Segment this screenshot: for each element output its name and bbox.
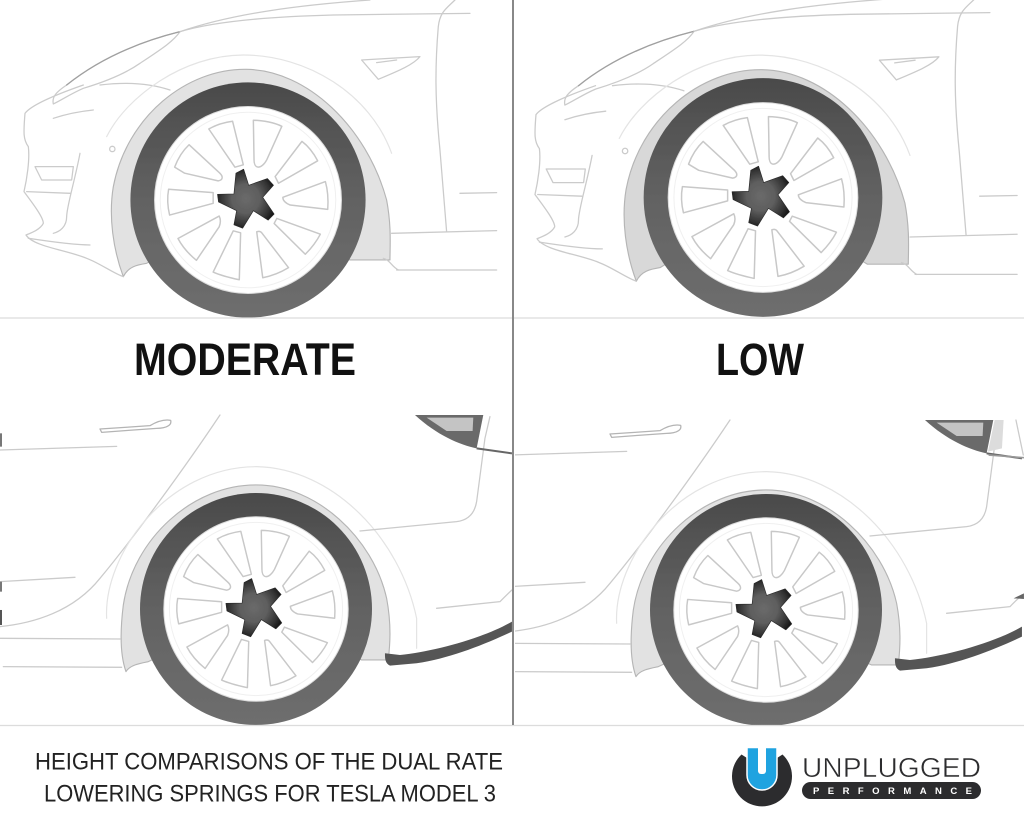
panel: moderate front wheel bbox=[24, 0, 497, 318]
panel: moderate rear wheel bbox=[0, 415, 512, 725]
heading: low: LOW bbox=[716, 334, 804, 385]
badge: performance bbox=[802, 782, 981, 799]
wordmark: UNPLUGGED bbox=[802, 752, 981, 783]
front wheel, low bbox=[644, 78, 882, 317]
caption: LOWERING SPRINGS FOR TESLA MODEL 3 bbox=[44, 780, 496, 808]
heading: moderate: MODERATE bbox=[134, 334, 356, 385]
front wheel, moderate bbox=[130, 82, 366, 318]
caption bbox=[35, 748, 503, 808]
icon: U mark bbox=[732, 745, 792, 806]
car rear fender outline, moderate bbox=[0, 415, 512, 672]
caption: HEIGHT COMPARISONS OF THE DUAL RATE bbox=[35, 748, 503, 776]
car front fender outline, moderate bbox=[24, 0, 497, 277]
car rear fender outline, low bbox=[510, 420, 1022, 677]
rear wheel, moderate bbox=[140, 493, 372, 725]
badge: performance: PERFORMANCE bbox=[813, 786, 972, 797]
panel: low rear wheel bbox=[510, 420, 1024, 726]
logo: Unplugged Performance bbox=[732, 745, 981, 806]
panel: low front wheel bbox=[535, 0, 1017, 317]
tail lamp trim, low bbox=[988, 420, 1024, 599]
rear wheel, low bbox=[650, 494, 882, 726]
car front fender outline, low bbox=[535, 0, 1017, 281]
